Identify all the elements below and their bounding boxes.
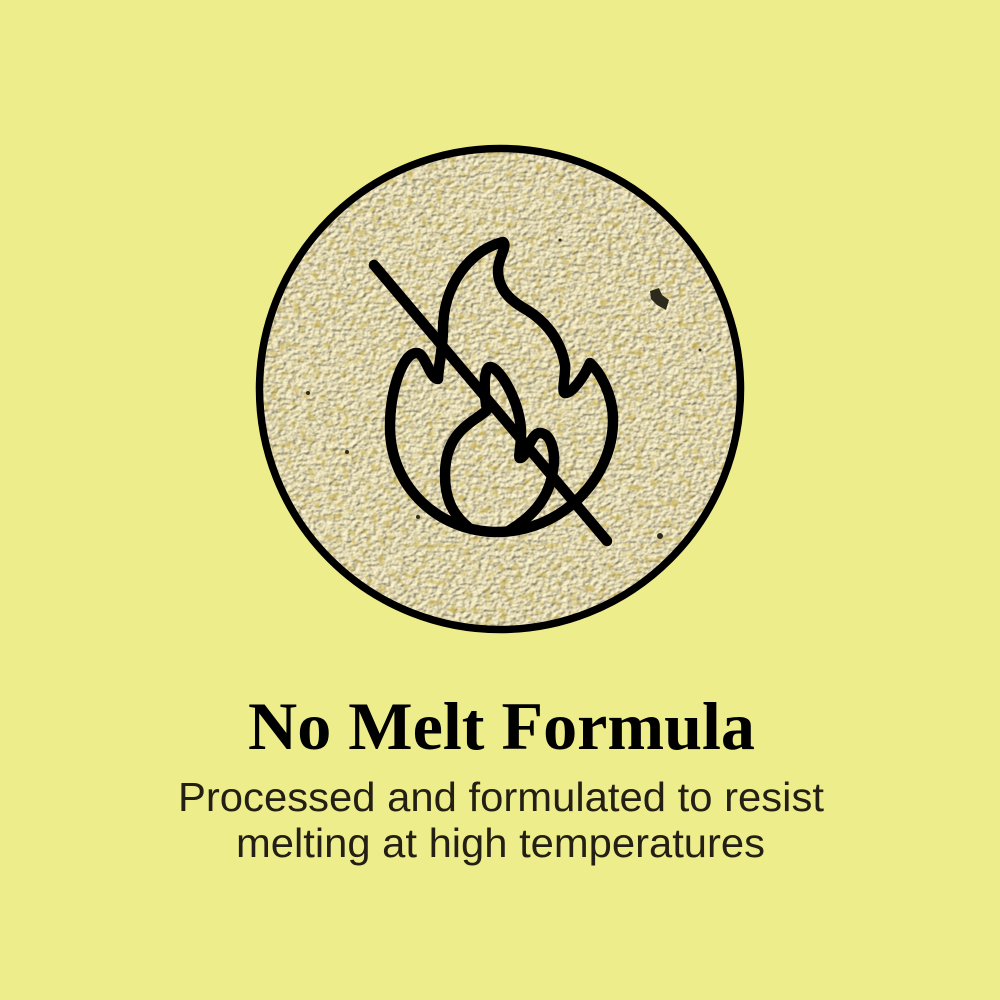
title: No Melt Formula [248,688,755,764]
infographic canvas [181,144,824,866]
description text [178,774,825,866]
icon: outer flame [390,242,613,532]
icon: slash line [374,265,607,541]
icon: inner flame [445,367,554,530]
description line 1: Processed and formulated to resist [178,774,825,820]
description line 2: melting at high temperatures [236,820,765,866]
icon: crossed-out flame [374,242,613,541]
textured circle badge [260,148,740,630]
